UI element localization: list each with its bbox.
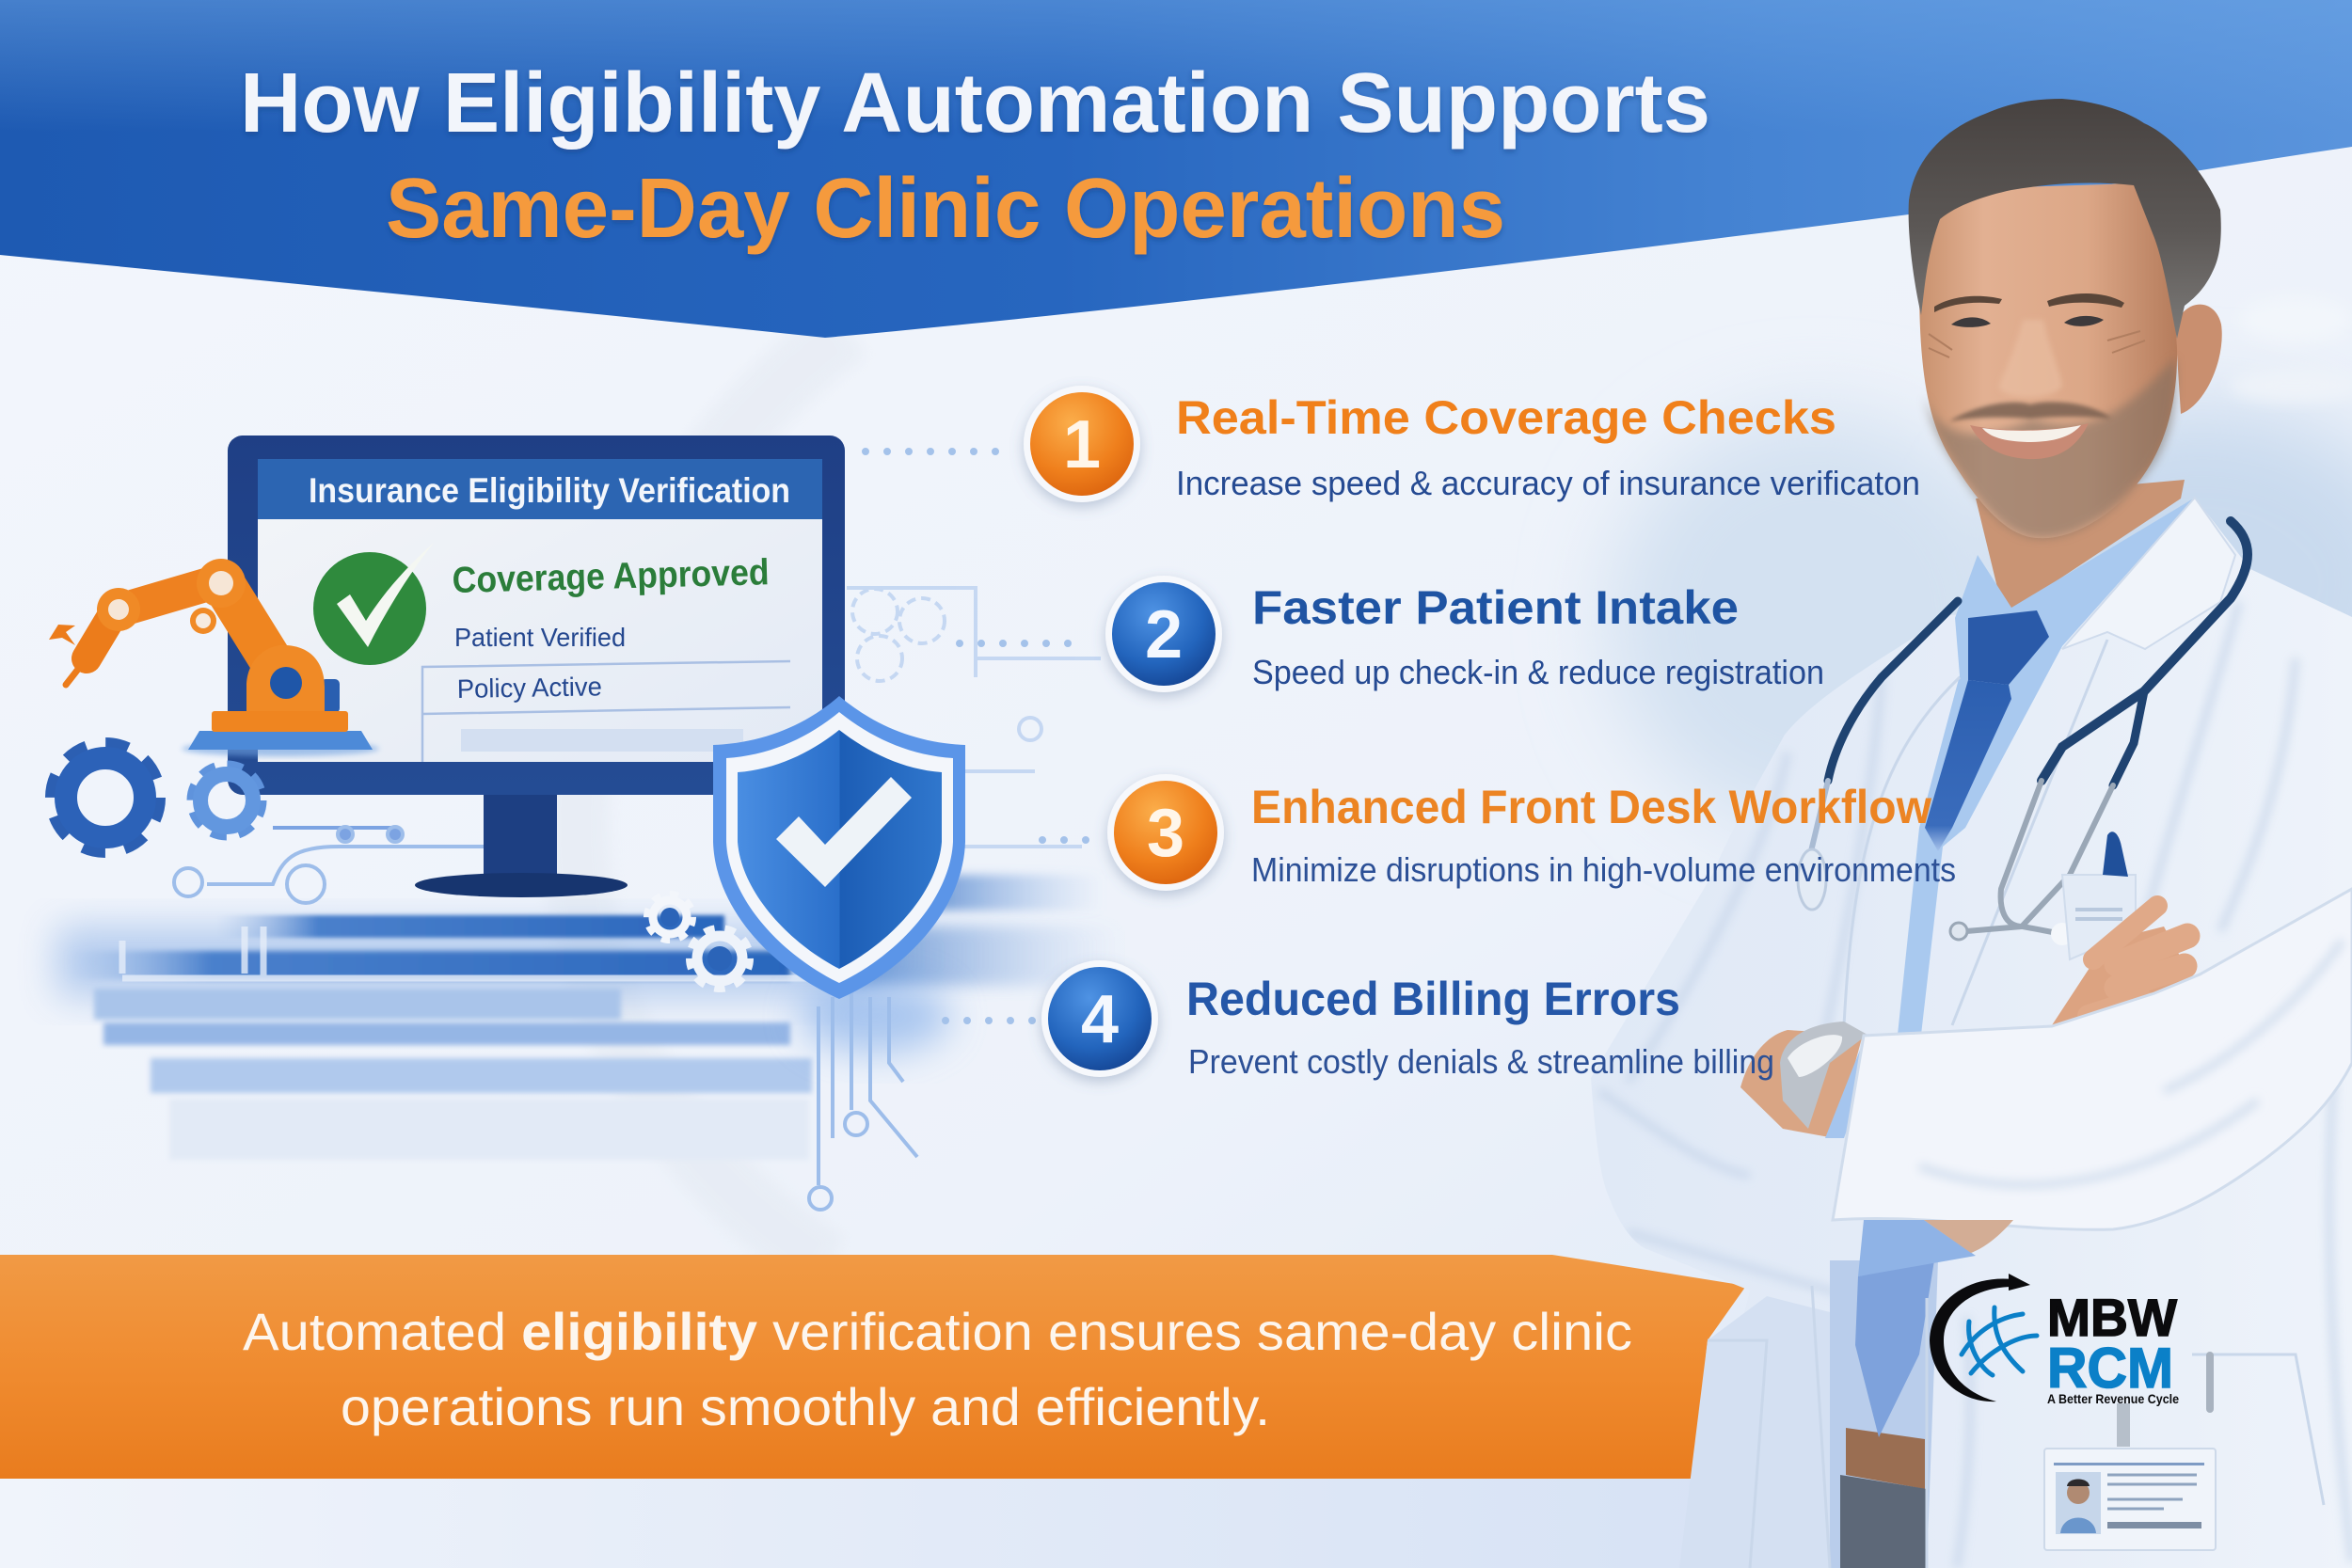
item 1 description: Increase speed & accuracy of insurance verificaton	[1176, 464, 1920, 502]
screen header bar: Insurance Eligibility Verification	[309, 471, 790, 510]
lower shirt cuff	[1858, 1220, 2013, 1276]
number badge 3: 3	[1147, 796, 1184, 871]
coverage approved text: Coverage Approved	[452, 552, 770, 601]
circuit traces	[174, 588, 1101, 1210]
item 1 heading: Real-Time Coverage Checks	[1176, 391, 1836, 444]
chest pocket and pen	[2062, 832, 2136, 959]
ear	[2175, 305, 2222, 414]
icon: shield	[713, 696, 965, 999]
item 2 heading: Faster Patient Intake	[1252, 581, 1739, 634]
icon: green check	[313, 543, 434, 665]
ID badge	[2044, 1449, 2216, 1550]
monitor	[228, 436, 845, 897]
nose	[1999, 320, 2062, 397]
banner message	[243, 1302, 1632, 1436]
dotted connectors	[866, 451, 1105, 1021]
number badge 2	[1105, 576, 1222, 692]
number badge 3	[1107, 774, 1224, 891]
item 4 heading: Reduced Billing Errors	[1186, 973, 1680, 1025]
title line 1: How Eligibility Automation Supports	[240, 56, 1710, 150]
coat lapel edges	[1844, 640, 2107, 1025]
number badge 4	[1041, 960, 1158, 1077]
monitor screen	[258, 459, 822, 762]
logo globe	[1962, 1307, 2037, 1375]
trousers and belt	[1830, 1260, 1938, 1568]
icon: robot arm	[49, 559, 379, 756]
lower left coat panel	[1679, 1296, 1830, 1568]
hand	[2052, 906, 2192, 1025]
pocket pen	[2206, 1352, 2214, 1413]
item 4 description: Prevent costly denials & streamline billing	[1188, 1042, 1774, 1081]
doctor	[1591, 99, 2352, 1568]
item 3 heading: Enhanced Front Desk Workflow	[1251, 781, 1931, 833]
policy active box: Policy Active	[457, 672, 602, 704]
lower tie	[1855, 1260, 1934, 1437]
coat	[1591, 498, 2352, 1568]
monitor stand	[415, 790, 628, 897]
face	[1919, 183, 2177, 538]
banner line 1: Automated eligibility verification ensures same-day clinic	[243, 1302, 1632, 1361]
banner	[0, 1255, 1746, 1479]
badge reel	[2117, 1403, 2130, 1447]
stethoscope	[1798, 521, 2248, 945]
logo swoosh	[1930, 1274, 2030, 1402]
neck	[1976, 480, 2185, 610]
coat folds	[1599, 602, 2352, 1568]
banner line 2: operations run smoothly and efficiently.	[341, 1377, 1270, 1436]
logo wordmark RCM: RCM	[2047, 1337, 2173, 1400]
monitor frame	[228, 436, 845, 795]
shirt	[1898, 498, 2195, 1035]
logo wordmark MBW: MBW	[2047, 1288, 2177, 1347]
title	[240, 56, 1710, 256]
tie	[1925, 610, 2049, 851]
mouth	[1970, 423, 2089, 459]
screen header bar	[258, 459, 822, 519]
item 2 description: Speed up check-in & reduce registration	[1252, 653, 1824, 691]
mustache	[1949, 402, 2111, 421]
header band	[0, 0, 2352, 338]
title line 2: Same-Day Clinic Operations	[386, 162, 1505, 256]
hair	[1909, 99, 2221, 339]
forearm and watch	[1740, 1022, 1882, 1138]
item 4	[1041, 960, 1774, 1081]
item 2	[1105, 576, 1824, 692]
item 3 description: Minimize disruptions in high-volume environments	[1251, 850, 1956, 889]
logo	[1930, 1274, 2179, 1406]
patient verified text: Patient Verified	[454, 623, 626, 652]
logo tagline: A Better Revenue Cycle	[2047, 1391, 2179, 1406]
number badge 1: 1	[1063, 407, 1101, 483]
policy active box	[422, 661, 790, 762]
item 3	[1107, 774, 1956, 891]
icon: small gears	[647, 895, 749, 988]
technology platform background	[56, 875, 1122, 1160]
lower pockets and coat seams	[1708, 1286, 2324, 1568]
coat collar	[2062, 498, 2235, 649]
stubble beard	[1925, 357, 2176, 538]
number badge 1	[1024, 386, 1140, 502]
icon: medium gear	[193, 767, 261, 834]
right sleeve	[1833, 889, 2352, 1229]
item 1	[1024, 386, 1920, 502]
sleeve fold	[1919, 941, 2343, 1185]
number badge 4: 4	[1081, 982, 1119, 1057]
icon: large gear	[55, 747, 156, 848]
eyes	[1929, 293, 2145, 357]
number badge 2: 2	[1145, 597, 1183, 673]
